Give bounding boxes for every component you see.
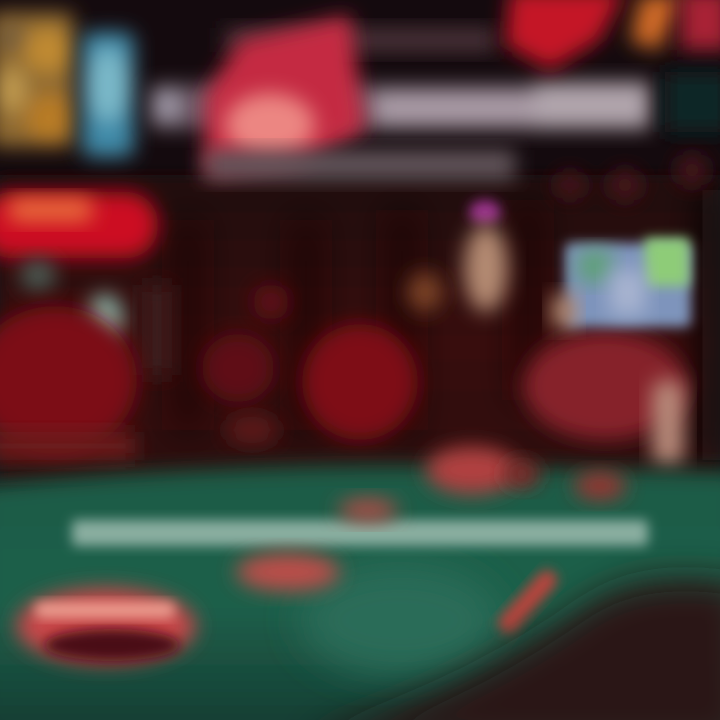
screen: green corner: [645, 238, 689, 286]
icon: top right red shape: [505, 0, 625, 70]
panel: wall screen: [552, 238, 691, 327]
panel: red neon sign: [0, 192, 158, 258]
seat: centre small: [202, 334, 274, 402]
screen: peach edge: [552, 295, 576, 327]
table band: pale text strip: [72, 520, 648, 546]
screen: pale centre: [610, 270, 645, 315]
chip: diagonal: [494, 566, 561, 637]
figure: small peach light: [407, 272, 443, 312]
figure: purple hat: [469, 200, 501, 224]
figure: right peach post: [652, 380, 684, 466]
panel: standing figures: [407, 200, 684, 466]
chip stack: large left: [16, 588, 196, 664]
icon: top right crimson shape: [680, 0, 720, 50]
icon: dark teal block: [665, 72, 720, 132]
figure: pale body: [464, 224, 508, 312]
seat: large left: [0, 306, 137, 454]
seat: lower small: [226, 416, 278, 444]
icon: blue tile: [82, 32, 134, 157]
screen: green left: [578, 250, 612, 282]
seat: centre large: [302, 324, 418, 440]
subheading band: [205, 150, 515, 180]
panel: left figure and lamp: [20, 259, 172, 375]
panel: header banner: [0, 0, 720, 180]
sign highlight: [8, 198, 93, 222]
panel: maroon back wall: [0, 175, 720, 485]
table highlight: [300, 565, 500, 675]
chip: upper table: [426, 446, 518, 494]
panel: dark foreground corner: [300, 579, 720, 720]
heading: faint upper line: [225, 28, 495, 52]
chip: centre: [236, 553, 340, 591]
icon: gold tile: [0, 12, 74, 147]
panel: poker chips: [16, 446, 626, 664]
seat: left base: [0, 432, 135, 460]
heading: pink logo highlight: [225, 93, 315, 157]
panel: green table: [0, 465, 720, 720]
chip: upper table shadow: [504, 460, 540, 488]
heading: red logo block: [205, 15, 365, 175]
panel: upper right wall lights: [556, 154, 708, 201]
seat: right large: [523, 332, 687, 440]
background: dark header: [0, 0, 720, 200]
icon: top right orange shape: [630, 0, 682, 50]
chip: small right: [574, 472, 626, 500]
panel: red round seats: [0, 284, 687, 460]
chip: small centre: [338, 498, 398, 522]
seat: upper small: [253, 284, 289, 320]
heading band: pale title: [150, 82, 650, 129]
